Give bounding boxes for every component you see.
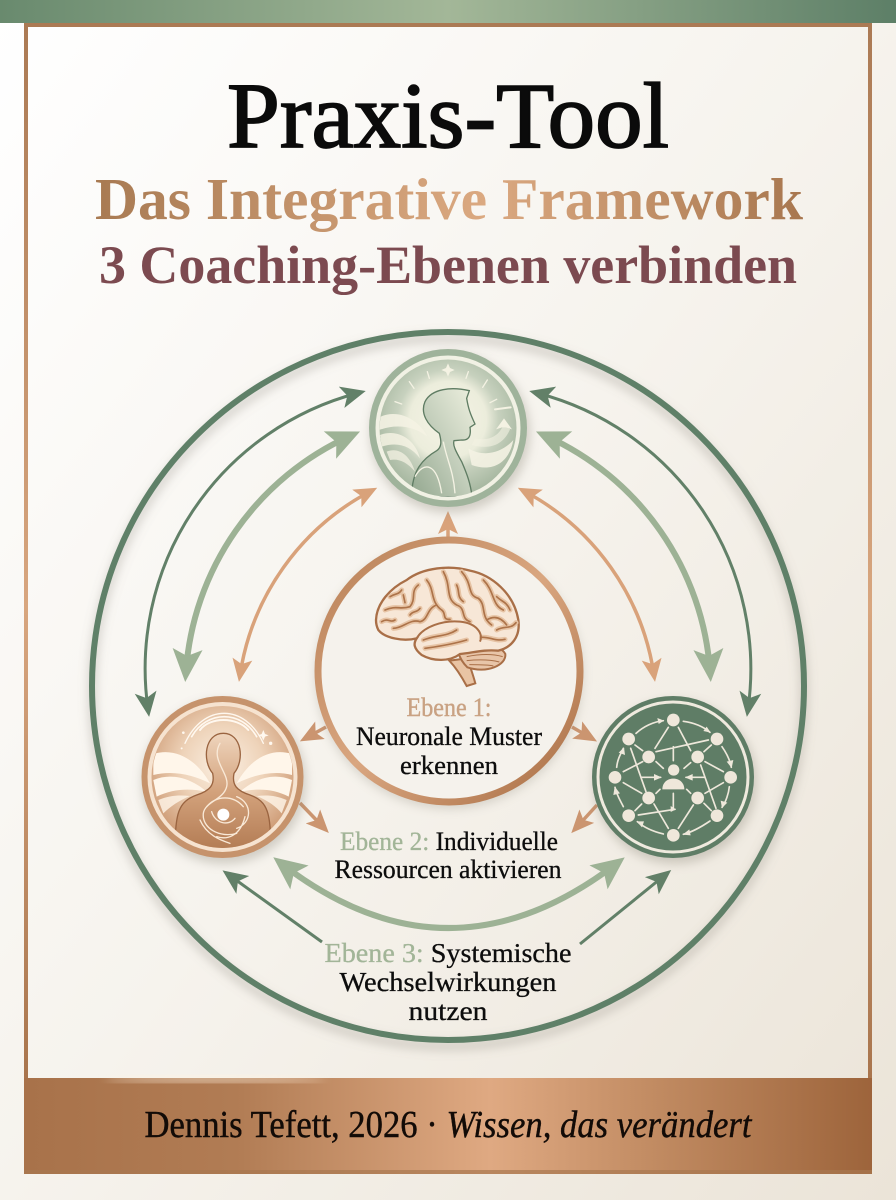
text block: level 3: Wechselwirkungen <box>340 967 557 997</box>
arrows: sage connections <box>186 436 710 671</box>
arrows: outer dark connections <box>145 393 751 709</box>
arrow: lower sage connection <box>282 864 616 928</box>
medallion: right network <box>592 696 757 864</box>
subtitle: coaching levels: 3 Coaching-Ebenen verbinden <box>99 235 797 295</box>
arrows: copper connections <box>240 491 654 675</box>
text block: level 3 <box>324 938 572 1026</box>
panel: centre circle <box>315 540 583 809</box>
arrows: centre to sides <box>300 727 597 828</box>
icon: brain <box>376 568 519 686</box>
text block: level 3: nutzen <box>408 996 488 1026</box>
medallion: left body <box>142 696 306 864</box>
medallion: top person <box>369 349 530 513</box>
text block: level 2 <box>334 827 562 884</box>
text block: level 3: Ebene 3: Systemische <box>324 938 572 968</box>
subtitle: framework: Das Integrative Framework <box>95 166 803 232</box>
text block: level 1: Ebene 1: <box>406 693 492 722</box>
arrows: lower dark connections <box>229 875 665 944</box>
text block: level 1 <box>356 693 542 780</box>
top green band <box>0 0 896 23</box>
footer text: Dennis Tefett, 2026 · Wissen, das verändert <box>144 1104 753 1146</box>
outer circle <box>92 332 804 1046</box>
title: Praxis-Tool <box>227 65 669 168</box>
text block: level 1: erkennen <box>400 751 498 780</box>
text block: level 2: Ebene 2: Individuelle <box>340 827 558 856</box>
text block: level 1: Neuronale Muster <box>356 722 542 751</box>
footer bar <box>24 1076 872 1174</box>
text block: level 2: Ressourcen aktivieren <box>334 855 562 884</box>
